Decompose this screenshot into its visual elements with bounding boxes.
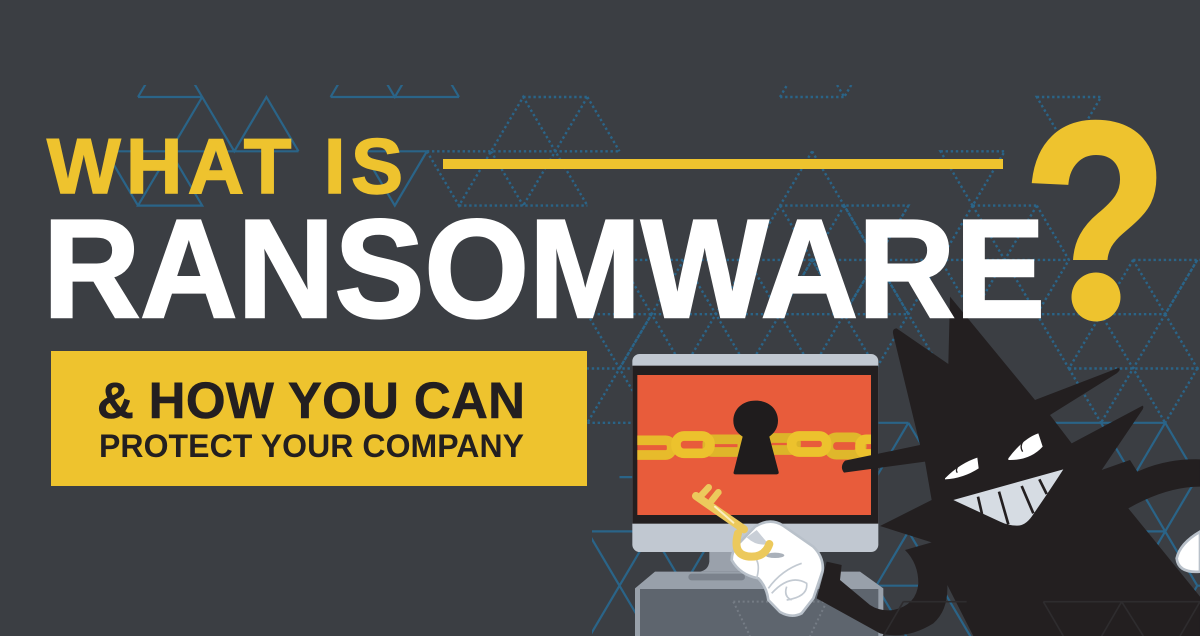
- yellow rule: [443, 159, 1003, 169]
- keyhole: [733, 401, 779, 474]
- callout line 1: & HOW YOU CAN: [97, 372, 525, 429]
- key ring: [736, 533, 769, 557]
- cloak, hat and arms: [817, 297, 1200, 636]
- second glove: [1177, 532, 1200, 572]
- yellow callout box: [51, 351, 587, 486]
- right eye: [1008, 433, 1043, 460]
- grin with teeth: [953, 469, 1063, 526]
- desk box: [635, 572, 883, 636]
- faint pattern on cloak: [883, 602, 1200, 636]
- callout line 2: PROTECT YOUR COMPANY: [99, 428, 524, 464]
- monitor and hand illustration: [630, 354, 883, 636]
- question mark: [1032, 120, 1156, 322]
- hacker character: [817, 297, 1200, 636]
- question mark: ?: [1023, 63, 1168, 381]
- title: what is: WHAT IS: [47, 122, 403, 210]
- monitor stand: [688, 550, 813, 580]
- monitor: [632, 354, 878, 552]
- chain: [630, 436, 883, 455]
- gloved hand: [732, 522, 823, 616]
- left eye: [945, 458, 979, 479]
- key shaft and head: [696, 487, 744, 529]
- title: ransomware: RANSOMWARE: [43, 190, 1045, 347]
